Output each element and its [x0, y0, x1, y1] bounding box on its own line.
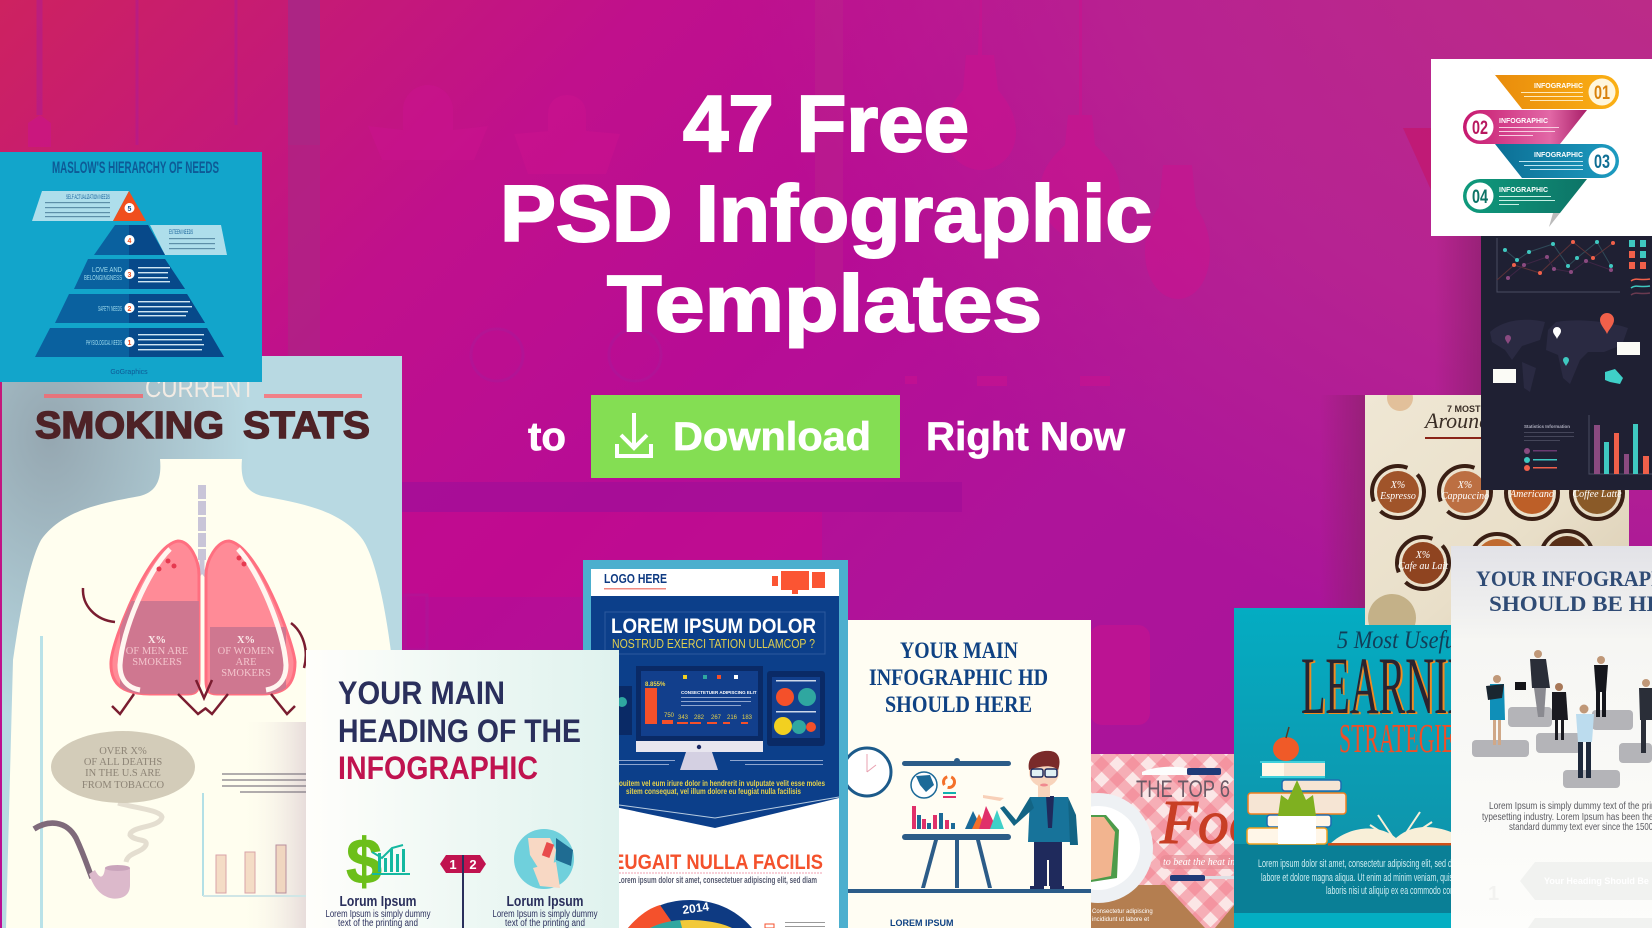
icon: Australia highlight: [1605, 369, 1623, 384]
statistics text and legend: [1524, 424, 1574, 471]
column text: left: Lorum Ipsum: [340, 893, 416, 910]
button label: Download: [673, 415, 871, 459]
puzzle platforms: [1472, 707, 1652, 788]
open book: [1328, 812, 1451, 846]
blue band 03: [1495, 144, 1619, 178]
text: to: to: [528, 415, 566, 459]
board bar chart: [912, 806, 955, 829]
column text: right: [492, 893, 598, 928]
heading: INFOGRAPHIC HD: [869, 665, 1048, 690]
heading: [1476, 566, 1652, 616]
icon: dollar and chart: $: [346, 825, 382, 897]
stack of books: [1247, 761, 1346, 844]
plate with sandwich: [1043, 793, 1153, 903]
monitor with bar chart: CONSECTETUER ADIPISCING ELIT: [681, 690, 757, 695]
pyramid: 4: [128, 238, 132, 245]
heading: smoking stats: SMOKING: [35, 405, 224, 447]
monitor with bar chart: 8.855%: [645, 682, 666, 688]
speech bubble: IN THE U.S ARE: [85, 768, 161, 779]
pyramid: BELONGINGNESS: [84, 275, 122, 282]
heading: smoking stats: STATS: [243, 405, 370, 447]
plant in pot: [1278, 780, 1316, 844]
presentation board: [902, 758, 1011, 888]
left lung: X%: [148, 635, 166, 646]
script heading: food: Food: [1159, 789, 1292, 857]
fade on lower right: [240, 722, 310, 928]
monitor with bar chart: 216: [727, 715, 738, 721]
title: 47 Free: [683, 79, 969, 168]
legend squiggles: [1631, 279, 1650, 295]
pink band 02: [1463, 110, 1587, 144]
heading: [338, 675, 581, 786]
script heading: 5 Most Useful: [1337, 627, 1462, 654]
panel: blue logo template: [583, 560, 848, 928]
faint step arrows: Your Heading Should Be: [1544, 876, 1649, 886]
heading box: [605, 612, 825, 654]
right lung: ARE: [236, 657, 256, 668]
lung legs: [112, 680, 295, 714]
callout: esteem needs: ESTEEM NEEDS: [169, 229, 193, 236]
yellow paragraph: [619, 778, 825, 796]
speech bubble: OVER X%: [99, 746, 147, 757]
statistics text and legend: Statistics Information: [1524, 424, 1570, 429]
icon: download arrow: [617, 413, 651, 456]
left lung: OF MEN ARE: [126, 646, 188, 657]
speech bubble: OF ALL DEATHS: [84, 757, 162, 768]
small legend marker: [765, 922, 825, 928]
funnel tail shadows: [1488, 66, 1560, 227]
caption lines under devices: [619, 760, 823, 765]
map callouts: [1493, 342, 1640, 383]
panel: green heading template: [306, 650, 619, 928]
heading: 7 MOST POPULAR: [1447, 404, 1528, 414]
presenter: [983, 751, 1078, 889]
heading: INFOGRAPHIC: [338, 750, 538, 786]
ring labels: Espresso: [1379, 491, 1416, 502]
monitor with bar chart: 183: [742, 715, 753, 721]
panel: teal learning strategies template: [1234, 608, 1507, 928]
heading: YOUR MAIN: [900, 638, 1018, 663]
ring labels: Coffee Latte: [1572, 489, 1622, 500]
callout: self actualization: SELF ACTUALIZATION NEEDS: [66, 194, 110, 201]
map pins: [1505, 313, 1614, 366]
small bar chart of cigarettes: [203, 773, 307, 896]
board triangles: [965, 806, 1004, 829]
ring labels: Cappuccino: [1441, 491, 1489, 502]
left lung: [111, 541, 200, 694]
wood table: [1091, 885, 1234, 928]
orange band 01: [1495, 75, 1619, 109]
ring labels: Cafe au Lait: [1398, 561, 1448, 572]
callout: self actualization: [32, 191, 129, 221]
trachea: [190, 485, 214, 585]
heading: Around: [1423, 408, 1491, 433]
pyramid: 5: [128, 206, 132, 213]
floor line: [848, 889, 1091, 893]
right lung: [206, 541, 295, 694]
people icons: [1629, 240, 1646, 269]
ring labels: X%: [1415, 550, 1430, 561]
number tag: [440, 855, 486, 928]
right lung: SMOKERS: [221, 668, 271, 679]
heading box: LOREM IPSUM DOLOR: [611, 615, 816, 638]
panel: cream presenter template: [848, 620, 1091, 928]
pyramid: SAFETY NEEDS: [98, 306, 122, 313]
bar chart: [1589, 415, 1652, 474]
fork: [1170, 875, 1234, 881]
pink band 02: INFOGRAPHIC: [1499, 118, 1548, 125]
footer caption: LOREM IPSUM: [890, 918, 954, 928]
panel: coffee template: [1365, 395, 1629, 625]
faint step arrows: [1488, 862, 1652, 928]
donut chart: 2014: [681, 899, 710, 917]
logo header: LOGO HERE: [604, 572, 667, 586]
icon: clock: [843, 748, 891, 796]
pyramid: LOVE AND: [92, 267, 122, 274]
blue band 03: 03: [1594, 152, 1610, 173]
column text: left: [326, 893, 430, 928]
pyramid: 2: [128, 306, 132, 313]
panel: Maslow hierarchy of needs: [0, 152, 262, 382]
world map: [1490, 320, 1628, 392]
body paragraph: [1258, 858, 1456, 897]
ring labels: [1379, 480, 1622, 572]
green band 04: 04: [1472, 187, 1488, 208]
left lung: SMOKERS: [132, 657, 182, 668]
right lung: X%: [237, 635, 255, 646]
pyramid: PHYSIOLOGICAL NEEDS: [86, 340, 122, 347]
body silhouette: [6, 459, 400, 928]
pink band 02: 02: [1472, 118, 1488, 139]
pyramid: 1: [128, 340, 132, 347]
body text on wood: [1092, 909, 1153, 923]
ring labels: X%: [1390, 480, 1405, 491]
left arm and right arm: [83, 588, 306, 668]
download button: [591, 395, 900, 478]
monitor with bar chart: 267: [711, 715, 722, 721]
panel: food template: [1091, 754, 1292, 928]
decorative cookies: [1368, 385, 1416, 642]
red rules and CURRENT heading: [44, 373, 362, 403]
body text on wood: Consectetur adipiscing: [1092, 909, 1153, 915]
monitor with bar chart: [636, 666, 763, 770]
left vertical rule: [40, 636, 43, 928]
panel: smoking stats infographic: [2, 356, 402, 928]
speech bubble: FROM TOBACCO: [82, 780, 165, 791]
number tag: 1: [449, 857, 457, 872]
heading: SHOULD HERE: [885, 692, 1032, 717]
number tag: 2: [469, 857, 477, 872]
column text: right: Lorum Ipsum: [506, 893, 584, 910]
orange band 01: 01: [1594, 83, 1610, 104]
footer note: GoGraphics: [110, 369, 148, 376]
monitor with bar chart: 750: [664, 713, 675, 719]
pyramid: [35, 191, 224, 357]
ring labels: Americano: [1509, 489, 1554, 500]
heading: the top 6: THE TOP 6: [1136, 776, 1230, 803]
monitor with bar chart: 343: [678, 715, 689, 721]
panel: business people template: [1451, 546, 1652, 928]
donut chart: [628, 899, 752, 928]
globe and donut: [911, 772, 956, 798]
faint step arrows: 1: [1488, 883, 1499, 905]
callout: esteem needs: [150, 225, 227, 255]
heading: smoking stats: [35, 405, 370, 447]
icon: pipe: [34, 823, 130, 899]
navy chevron section: [591, 596, 839, 828]
icon: dollar and chart: [346, 825, 410, 897]
tagline: to beat the heat in G: [1163, 857, 1245, 868]
right lung: OF WOMEN: [218, 646, 275, 657]
column text: left: Lorem Ipsum is simply dummy: [326, 909, 430, 920]
heading: [869, 638, 1048, 717]
line chart: [1497, 238, 1620, 292]
icon: wrist watch: [514, 829, 574, 889]
panel: dark statistics dashboard: [1481, 236, 1652, 490]
paragraph: [1482, 800, 1652, 833]
title: [500, 79, 1152, 348]
side tablet: [612, 686, 632, 735]
body text on wood: incididunt ut labore et: [1092, 917, 1149, 923]
ring labels: X%: [1457, 480, 1472, 491]
heading: YOUR MAIN: [338, 675, 505, 711]
monitor with bar chart: 282: [694, 715, 705, 721]
tablet with circles: [767, 671, 825, 746]
green band 04: [1463, 179, 1587, 213]
knife: [1142, 767, 1221, 775]
red rules and CURRENT heading: CURRENT: [145, 373, 255, 403]
business people: [1486, 650, 1652, 778]
drop shadows beside panels: [1320, 128, 1481, 608]
heading: HEADING OF THE: [338, 713, 581, 749]
heading: [1423, 404, 1528, 439]
pyramid: 3: [128, 272, 132, 279]
title: Templates: [607, 259, 1042, 348]
subheading: [601, 851, 823, 886]
coffee rings: [1372, 466, 1623, 589]
logo header: [604, 571, 825, 594]
title: PSD Infographic: [500, 169, 1152, 258]
icon: apple: [1273, 727, 1299, 761]
text: right now: Right Now: [926, 415, 1126, 459]
panel: funnel infographic template: [1431, 59, 1652, 236]
green band 04: INFOGRAPHIC: [1499, 187, 1548, 194]
blue band 03: INFOGRAPHIC: [1534, 152, 1583, 159]
speech bubble: [51, 731, 195, 862]
orange band 01: INFOGRAPHIC: [1534, 83, 1583, 90]
